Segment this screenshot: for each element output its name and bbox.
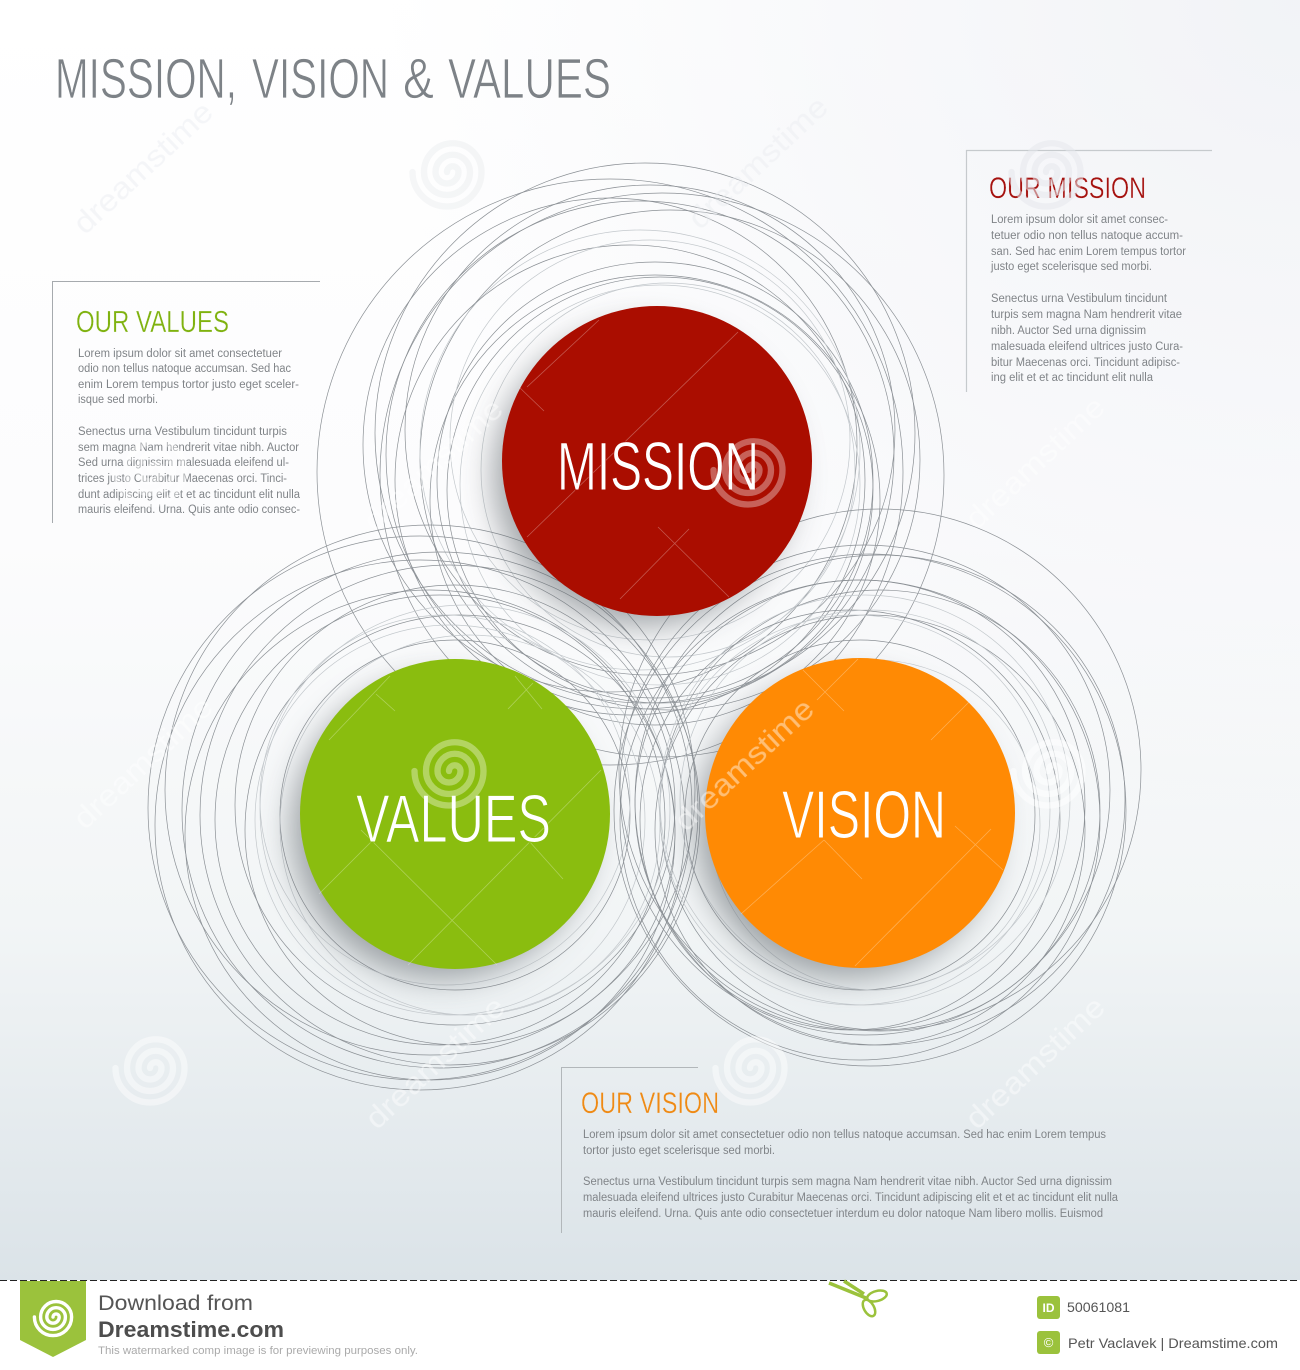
watermark: dreamstime text: dreamstime [667, 691, 821, 838]
text: image id: 50061081 [1067, 1299, 1130, 1315]
text: values body: odio non tellus natoque accumsan. Sed hac [78, 363, 291, 375]
watermark: dreamstime text: dreamstime [66, 689, 220, 836]
text: values body: enim Lorem tempus tortor justo eget sceler- [78, 379, 299, 391]
watermark: dreamstime text [66, 89, 1112, 1136]
title: VALUES [448, 47, 611, 111]
icon: scissors [829, 1281, 888, 1318]
text: mission body: turpis sem magna Nam hendrerit vitae [991, 309, 1182, 321]
icon: copyright badge: © [1044, 1335, 1054, 1350]
text: mission body: bitur Maecenas orci. Tincidunt adipisc- [991, 357, 1180, 369]
text: values body: Senectus urna Vestibulum tincidunt turpis [78, 426, 287, 438]
icon: green ribbon with spiral [20, 1281, 86, 1357]
text: mission body: tetuer odio non tellus natoque accum- [991, 230, 1183, 242]
circle: values: VALUES [356, 781, 551, 857]
heading: our values: OUR VALUES [76, 304, 229, 339]
circle: vision [696, 658, 1015, 978]
icon: copyright badge [1037, 1331, 1060, 1354]
text: dreamstime brand: Dreamstime.com [98, 1317, 284, 1342]
text: values body [78, 348, 301, 516]
heading: our vision: OUR VISION [581, 1087, 719, 1120]
text: vision body: malesuada eleifend ultrices justo Curabitur Maecenas orci. Tincidunt adipiscing elit et et ac tincidunt elit nulla [583, 1192, 1119, 1204]
circle: mission: MISSION [557, 428, 759, 505]
icon: id badge [1037, 1296, 1060, 1319]
watermark: dreamstime text: dreamstime [958, 389, 1112, 536]
text: values body: Lorem ipsum dolor sit amet consectetuer [78, 348, 282, 360]
title: & [403, 47, 434, 111]
title: MISSION, [55, 47, 237, 111]
text: author credit: Petr Vaclavek | Dreamstime.com [1068, 1335, 1278, 1351]
icon: id badge: ID [1042, 1301, 1055, 1315]
heading: our mission: OUR MISSION [989, 172, 1146, 205]
panel: our mission [966, 150, 1212, 392]
panel: our values [52, 282, 320, 523]
text: vision body [583, 1129, 1119, 1220]
scribbled rings: values [148, 525, 700, 1090]
text: mission body: nibh. Auctor Sed urna dignissim [991, 325, 1146, 337]
text: values body: trices justo Curabitur Maecenas orci. Tinci- [78, 473, 287, 485]
text: mission body: Senectus urna Vestibulum tincidunt [991, 293, 1168, 305]
watermark: spirals [116, 143, 1082, 1102]
text: mission body: Lorem ipsum dolor sit amet consec- [991, 214, 1168, 226]
circle: mission [493, 306, 812, 626]
watermark: dreamstime text: dreamstime [681, 89, 835, 236]
panel: our vision [562, 1068, 1119, 1233]
text: values body: sem magna Nam hendrerit vitae nibh. Auctor [78, 442, 299, 454]
text: mission body: malesuada eleifend ultrices justo Cura- [991, 341, 1183, 353]
text: vision body: Senectus urna Vestibulum tincidunt turpis sem magna Nam hendrerit vitae nibh. Auctor Sed urna dignissim [583, 1176, 1112, 1188]
scribbled rings: vision [614, 509, 1141, 1066]
text: mission body: justo eget scelerisque sed morbi. [990, 261, 1152, 273]
text: values body: Sed urna dignissim malesuada eleifend ul- [78, 457, 289, 469]
footer strip [0, 1280, 1300, 1370]
text: mission body [990, 214, 1186, 384]
text: vision body: tortor justo eget scelerisque sed morbi. [583, 1145, 775, 1157]
watermark: dreamstime text: dreamstime [358, 989, 512, 1136]
watermark: dreamstime text: dreamstime [66, 94, 220, 241]
text: mission body: san. Sed hac enim Lorem tempus tortor [991, 246, 1186, 258]
text: vision body: Lorem ipsum dolor sit amet consectetuer odio non tellus natoque accumsan. Sed hac enim Lorem tempus [583, 1129, 1106, 1141]
text: values body: isque sed morbi. [78, 394, 158, 406]
text: preview notice: This watermarked comp image is for previewing purposes only. [98, 1345, 418, 1357]
scribbled rings: mission [317, 163, 944, 765]
title: VISION [252, 47, 389, 111]
text: mission body: ing elit et et ac tincidunt elit nulla [991, 372, 1154, 384]
circle: values [291, 659, 610, 979]
text: download from: Download from [98, 1292, 253, 1315]
watermark: dreamstime text: dreamstime [356, 391, 510, 538]
title [55, 47, 611, 111]
circle: vision: VISION [782, 777, 946, 853]
text: values body: mauris eleifend. Urna. Quis ante odio consec- [78, 504, 300, 516]
text: values body: dunt adipiscing elit et et ac tincidunt elit nulla [78, 489, 301, 501]
text: vision body: mauris eleifend. Urna. Quis ante odio consectetuer interdum eu dolor natoque Nam libero mollis. Euismod [583, 1208, 1103, 1220]
watermark: dreamstime text: dreamstime [958, 989, 1112, 1136]
